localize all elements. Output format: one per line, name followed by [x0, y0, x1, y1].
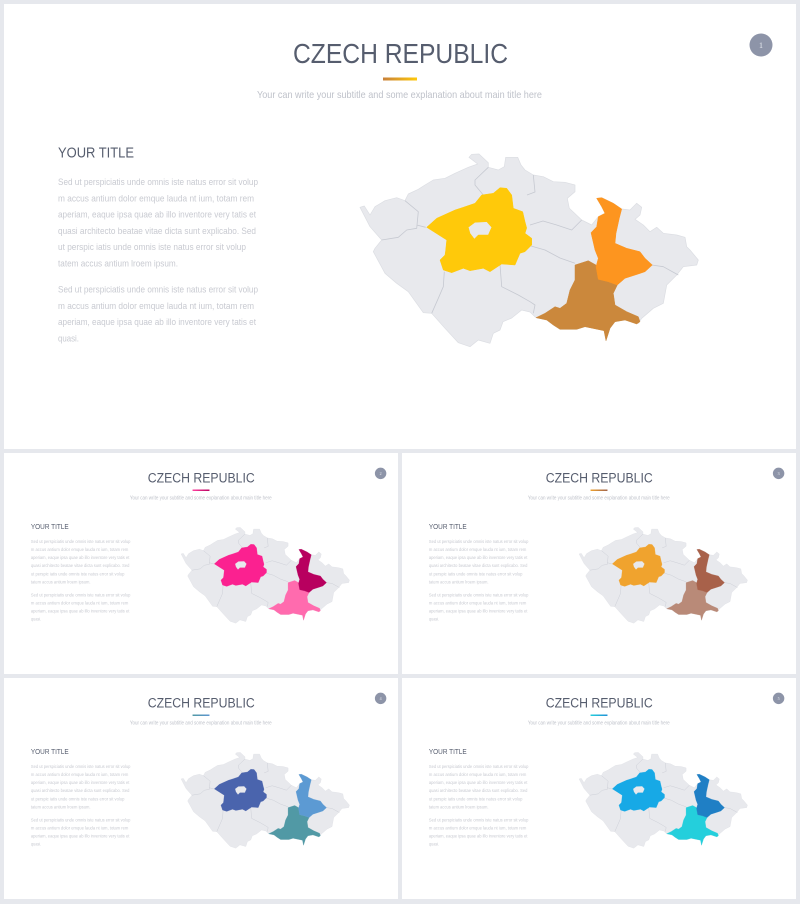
body text: m accus antium dolor emque lauda nt ium, totam rem [429, 600, 526, 606]
body text: aperiam, eaque ipsa quae ab illo inventore very tatis et [58, 210, 256, 221]
body text: ut perspic iatis unde omnis iste natus error sit volup [31, 796, 125, 802]
page number badge [773, 693, 784, 704]
body text: quasi architecto beatae vitae dicta sunt explicabo. Sed [58, 226, 256, 237]
body text: Sed ut perspiciatis unde omnis iste natus error sit volup [429, 539, 529, 545]
body text: m accus antium dolor emque lauda nt ium, totam rem [429, 547, 526, 553]
body text: m accus antium dolor emque lauda nt ium, totam rem [58, 301, 254, 312]
page number badge [375, 693, 386, 704]
accent bar [591, 490, 607, 491]
subtitle: Your can write your subtitle and some explanation about main title here [528, 496, 670, 502]
body text: aperiam, eaque ipsa quae ab illo inventore very tatis et [429, 555, 528, 561]
body text: Sed ut perspiciatis unde omnis iste natus error sit volup [58, 177, 258, 188]
panel: amber slide [402, 453, 796, 674]
body text: Sed ut perspiciatis unde omnis iste natus error sit volup [58, 285, 258, 296]
body text: tatem accus antium lroem ipsum. [31, 579, 91, 585]
body text: aperiam, eaque ipsa quae ab illo inventore very tatis et [429, 834, 528, 840]
body text: Sed ut perspiciatis unde omnis iste natus error sit volup [429, 592, 529, 598]
body text: m accus antium dolor emque lauda nt ium, totam rem [31, 547, 128, 553]
body text [31, 539, 131, 623]
accent bar [591, 715, 607, 716]
subtitle: Your can write your subtitle and some explanation about main title here [130, 721, 272, 727]
panel: pink slide [4, 453, 398, 674]
body text [429, 764, 529, 848]
body text: Sed ut perspiciatis unde omnis iste natus error sit volup [31, 592, 131, 598]
body text: aperiam, eaque ipsa quae ab illo inventore very tatis et [31, 834, 130, 840]
map [181, 527, 349, 623]
body text: Sed ut perspiciatis unde omnis iste natus error sit volup [31, 817, 131, 823]
body text: aperiam, eaque ipsa quae ab illo inventore very tatis et [429, 780, 528, 786]
body text: quasi. [429, 617, 439, 623]
subtitle: Your can write your subtitle and some explanation about main title here [130, 496, 272, 502]
body text: aperiam, eaque ipsa quae ab illo inventore very tatis et [31, 780, 130, 786]
page number badge: 3 [778, 471, 780, 476]
body text: Sed ut perspiciatis unde omnis iste natus error sit volup [429, 764, 529, 770]
section heading: YOUR TITLE [58, 144, 134, 162]
accent bar [193, 715, 209, 716]
body text: quasi architecto beatae vitae dicta sunt explicabo. Sed [429, 788, 528, 794]
map [181, 752, 349, 848]
section heading: YOUR TITLE [429, 522, 467, 531]
panel: main slide [4, 4, 796, 449]
map [579, 752, 747, 848]
accent bar [383, 78, 417, 80]
body text: m accus antium dolor emque lauda nt ium, totam rem [58, 193, 254, 204]
section heading: YOUR TITLE [31, 747, 69, 756]
body text: m accus antium dolor emque lauda nt ium, totam rem [31, 825, 128, 831]
body text [429, 539, 529, 623]
body text: quasi architecto beatae vitae dicta sunt explicabo. Sed [429, 563, 528, 569]
body text: m accus antium dolor emque lauda nt ium, totam rem [31, 772, 128, 778]
body text: quasi. [58, 334, 79, 344]
title: CZECH REPUBLIC [148, 694, 255, 710]
body text: aperiam, eaque ipsa quae ab illo inventore very tatis et [429, 609, 528, 615]
map [360, 154, 698, 347]
body text: quasi architecto beatae vitae dicta sunt explicabo. Sed [31, 563, 130, 569]
title: CZECH REPUBLIC [148, 469, 255, 485]
page number badge: 4 [380, 696, 382, 701]
body text: tatem accus antium lroem ipsum. [429, 804, 489, 810]
body text: Sed ut perspiciatis unde omnis iste natus error sit volup [31, 539, 131, 545]
body text: m accus antium dolor emque lauda nt ium, totam rem [429, 772, 526, 778]
body text [58, 177, 258, 344]
body text: quasi. [429, 842, 439, 848]
body text: ut perspic iatis unde omnis iste natus error sit volup [429, 796, 523, 802]
body text: tatem accus antium lroem ipsum. [58, 258, 178, 270]
title: CZECH REPUBLIC [293, 38, 508, 69]
subtitle: Your can write your subtitle and some explanation about main title here [257, 89, 542, 101]
body text: aperiam, eaque ipsa quae ab illo inventore very tatis et [31, 609, 130, 615]
body text: tatem accus antium lroem ipsum. [429, 579, 489, 585]
body text: m accus antium dolor emque lauda nt ium, totam rem [429, 825, 526, 831]
body text: ut perspic iatis unde omnis iste natus error sit volup [429, 571, 523, 577]
body text: aperiam, eaque ipsa quae ab illo inventore very tatis et [31, 555, 130, 561]
body text: Sed ut perspiciatis unde omnis iste natus error sit volup [31, 764, 131, 770]
title: CZECH REPUBLIC [546, 694, 653, 710]
panel: indigo slide [4, 678, 398, 899]
accent bar [193, 490, 209, 491]
map [579, 527, 747, 623]
panel: cyan slide [402, 678, 796, 899]
subtitle: Your can write your subtitle and some explanation about main title here [528, 721, 670, 727]
page number badge: 2 [380, 471, 382, 476]
page number badge [375, 468, 386, 479]
body text: m accus antium dolor emque lauda nt ium, totam rem [31, 600, 128, 606]
page number badge [773, 468, 784, 479]
body text: aperiam, eaque ipsa quae ab illo inventore very tatis et [58, 317, 256, 328]
body text: ut perspic iatis unde omnis iste natus error sit volup [31, 571, 125, 577]
section heading: YOUR TITLE [429, 747, 467, 756]
body text [31, 764, 131, 848]
page number badge: 5 [778, 696, 780, 701]
body text: quasi. [31, 842, 41, 848]
body text: Sed ut perspiciatis unde omnis iste natus error sit volup [429, 817, 529, 823]
body text: tatem accus antium lroem ipsum. [31, 804, 91, 810]
section heading: YOUR TITLE [31, 522, 69, 531]
page number badge: 1 [759, 41, 763, 50]
body text: quasi. [31, 617, 41, 623]
page number badge [750, 34, 772, 56]
body text: ut perspic iatis unde omnis iste natus error sit volup [58, 242, 246, 253]
title: CZECH REPUBLIC [546, 469, 653, 485]
body text: quasi architecto beatae vitae dicta sunt explicabo. Sed [31, 788, 130, 794]
